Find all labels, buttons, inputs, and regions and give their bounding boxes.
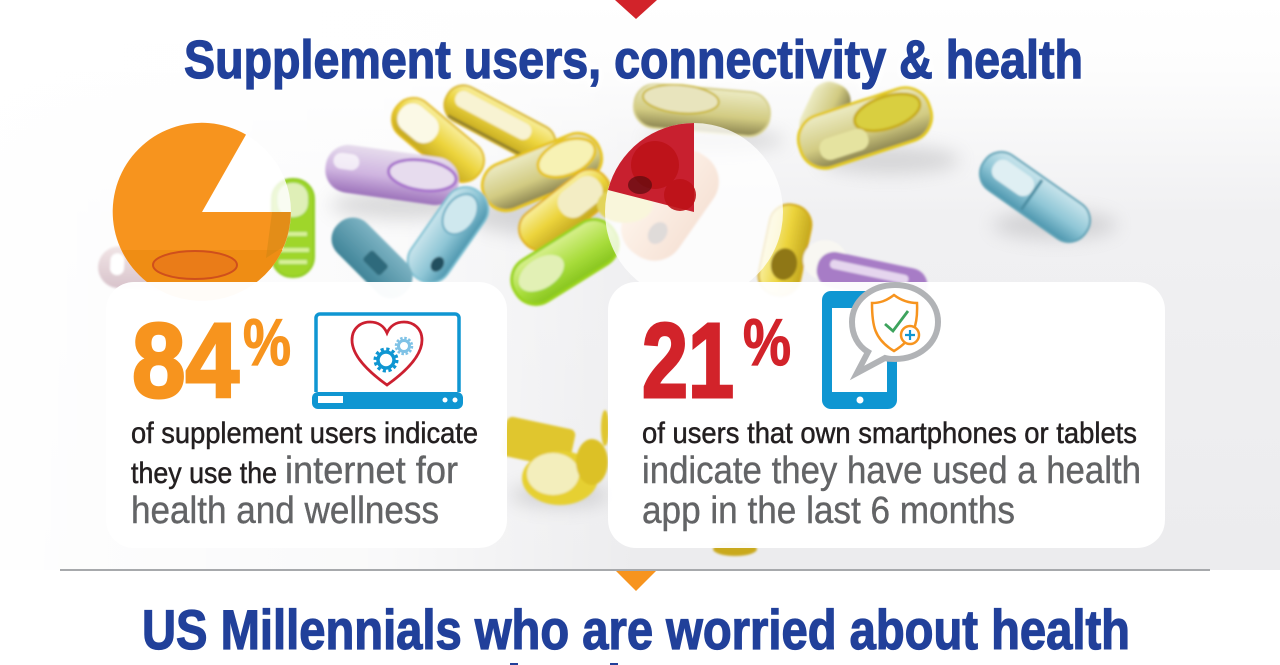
yellow upright behind <box>793 76 857 150</box>
pie chart: 21% <box>605 123 783 301</box>
lower white section <box>0 570 1280 665</box>
text: supplement users: health and wellness <box>131 490 439 532</box>
icon: laptop with heart and gears <box>312 314 463 409</box>
lime centre <box>503 211 627 313</box>
heading: US Millennials: US Millennials who are worried about health <box>142 598 1130 661</box>
text: health app use: indicate they have used a health <box>642 450 1141 492</box>
text: supplement users: internet for <box>285 450 458 492</box>
text: health app use: of users that own smartphones or tablets <box>642 417 1137 450</box>
yellow under pie <box>755 201 815 299</box>
olive top <box>632 81 772 138</box>
purple right <box>813 249 931 307</box>
yellow 2 <box>438 79 562 169</box>
red pointer triangle <box>615 0 657 19</box>
text: supplement users: of supplement users indicate <box>131 417 478 450</box>
text: health app use <box>642 417 1141 532</box>
yellow bottom cluster <box>500 416 576 469</box>
percent sign: % <box>243 305 291 379</box>
icon: tablet with health shield bubble <box>822 285 938 409</box>
text: health app use: app in the last 6 months <box>642 490 1015 532</box>
teal <box>323 209 421 307</box>
lime left <box>272 179 314 277</box>
orange pointer triangle <box>616 571 656 591</box>
percent sign: % <box>743 305 791 379</box>
purple <box>322 142 462 208</box>
panel: 21% stat <box>608 282 1165 548</box>
clipped tops of next heading line <box>510 663 618 665</box>
big number 21: 21 <box>642 302 734 420</box>
yellow cluster <box>792 81 938 175</box>
heading glow + heading: Supplement users, connectivity & health <box>184 30 1083 90</box>
pie chart: 84% <box>112 122 291 282</box>
pale blue <box>400 179 496 291</box>
text: supplement users <box>131 417 478 532</box>
peach capsule under red pie <box>609 137 731 273</box>
blue right <box>972 144 1098 250</box>
yellow 4 <box>511 161 619 259</box>
left hidden pale capsule <box>97 245 243 295</box>
yellow 3 <box>476 127 608 217</box>
heading glow + heading: Supplement users, connectivity & health <box>184 30 1083 90</box>
big number 84: 84 <box>132 302 239 420</box>
text: supplement users: they use the <box>131 457 277 490</box>
yellow 1 <box>384 90 492 190</box>
panel: 84% stat <box>106 282 507 548</box>
white blob <box>803 240 847 280</box>
